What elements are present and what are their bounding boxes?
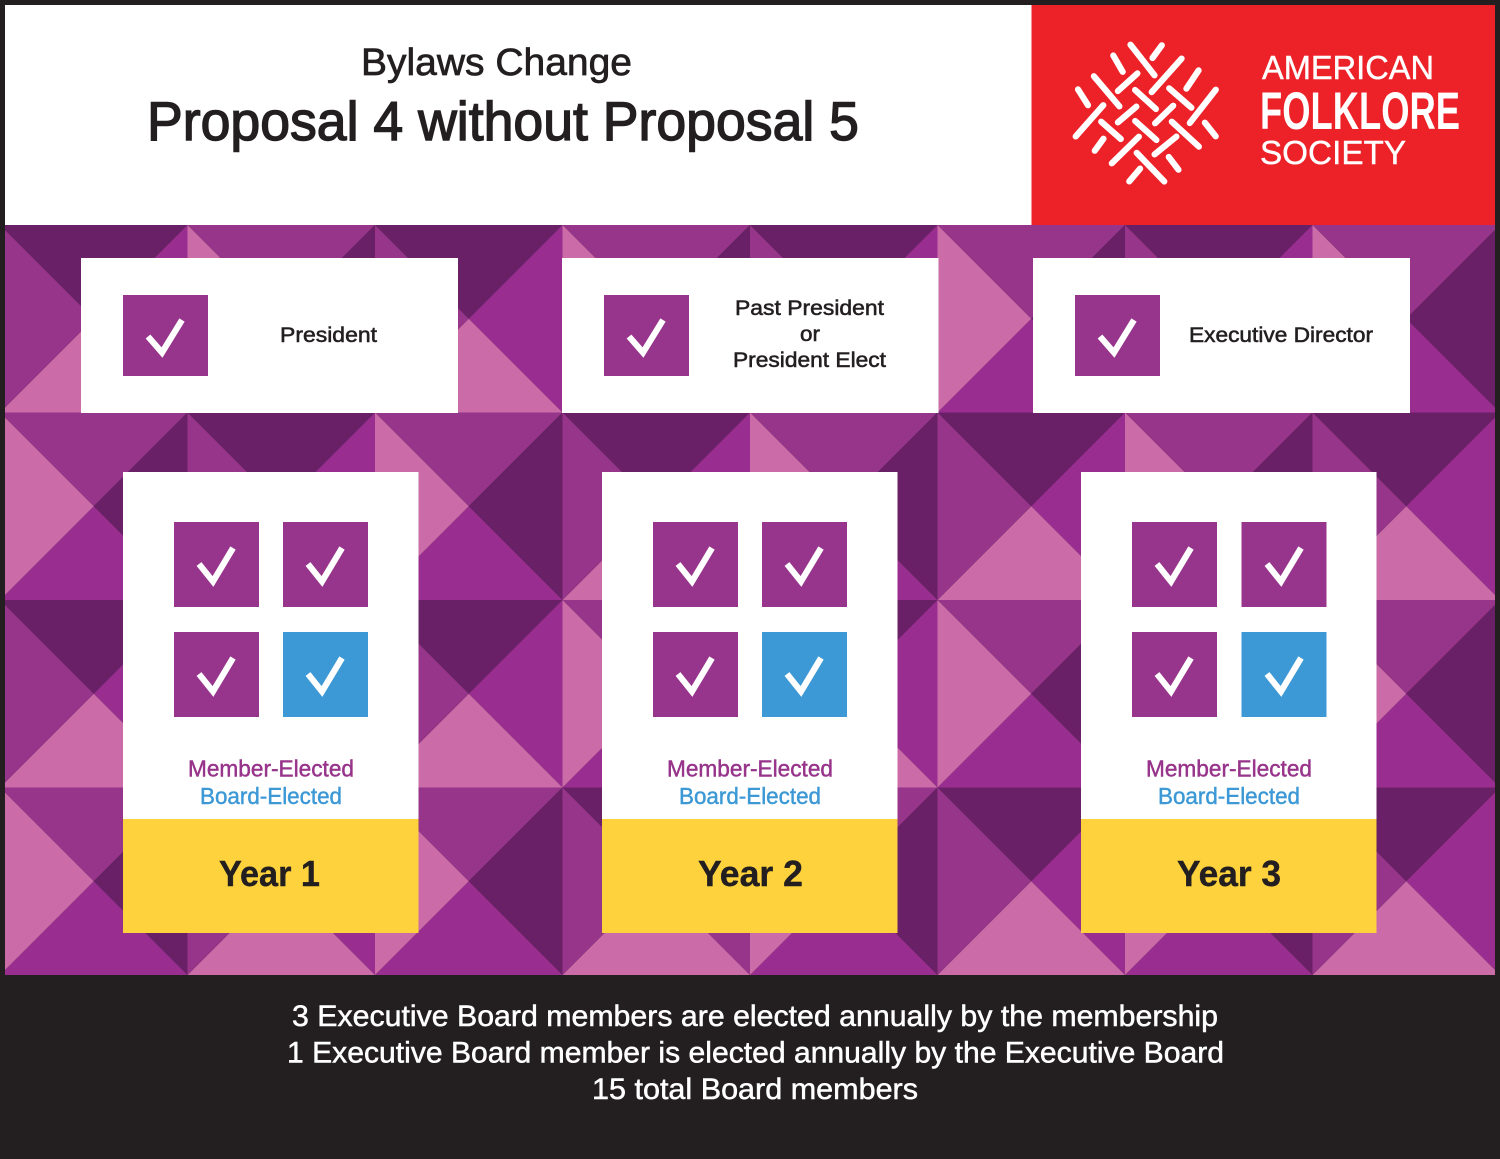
footer text block: 15 total Board members <box>592 1073 918 1106</box>
title: Proposal 4 without Proposal 5 <box>147 90 859 152</box>
logo wordmark: SOCIETY <box>1260 134 1406 171</box>
label: executive director: Executive Director <box>1189 324 1373 347</box>
footer text block <box>287 1000 1224 1106</box>
panel: past president or president elect <box>562 258 938 413</box>
label: president: President <box>280 324 377 347</box>
legend: Board-Elected <box>200 783 342 809</box>
legend: Member-Elected <box>667 756 833 782</box>
label: past president or president elect <box>733 297 886 372</box>
background triangle pattern <box>0 225 1500 975</box>
header: title panel <box>5 5 1032 225</box>
logo wordmark: AMERICAN <box>1262 49 1434 86</box>
label: past president or president elect: President Elect <box>733 349 886 372</box>
footer text block: 3 Executive Board members are elected annually by the membership <box>292 1000 1218 1033</box>
icon: check box <box>604 295 689 376</box>
check box grid <box>1132 522 1326 717</box>
legend <box>188 756 354 809</box>
icon: check box <box>1075 295 1160 376</box>
year 3 banner <box>1081 819 1376 933</box>
panel: president <box>81 258 458 413</box>
legend: Member-Elected <box>188 756 354 782</box>
panel: executive director <box>1033 258 1410 413</box>
year 1 banner: Year 1 <box>219 853 320 894</box>
legend <box>1146 756 1312 809</box>
heading: bylaws change: Bylaws Change <box>361 42 632 84</box>
logo wordmark <box>1260 49 1460 171</box>
legend <box>667 756 833 809</box>
icon: woven logo mark <box>1076 45 1216 182</box>
check box grid <box>174 522 368 717</box>
year 3 banner: Year 3 <box>1177 853 1281 894</box>
legend: Member-Elected <box>1146 756 1312 782</box>
year 1 banner <box>123 819 418 933</box>
panel: year 1 <box>123 472 418 933</box>
icon: check box <box>123 295 208 376</box>
legend: Board-Elected <box>1158 783 1300 809</box>
check box grid <box>653 522 847 717</box>
panel: year 3 <box>1081 472 1376 933</box>
legend: Board-Elected <box>679 783 821 809</box>
year 2 banner: Year 2 <box>698 853 803 894</box>
header: logo panel <box>1032 5 1495 225</box>
label: past president or president elect: or <box>800 323 820 346</box>
panel: year 2 <box>602 472 898 933</box>
year 2 banner <box>602 819 898 933</box>
label: past president or president elect: Past President <box>735 297 884 320</box>
footer text block: 1 Executive Board member is elected annually by the Executive Board <box>287 1036 1224 1070</box>
